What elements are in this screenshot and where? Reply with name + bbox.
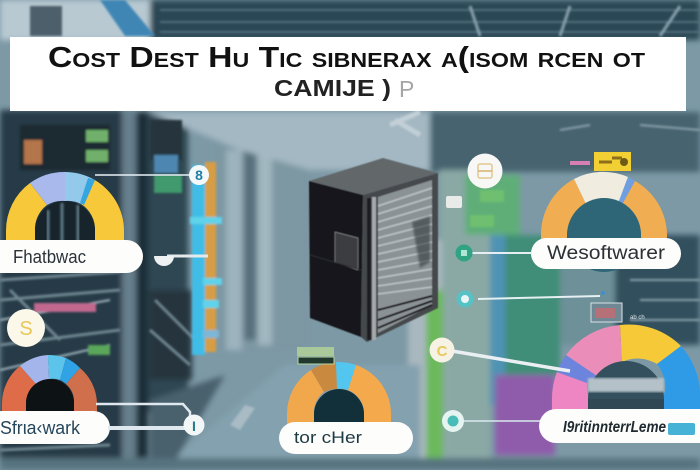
connector and badge: C badge to donut 5 xyxy=(430,338,570,371)
connector and badge: top left number: 8 xyxy=(195,167,203,183)
donut 5 label pill xyxy=(539,409,700,443)
donut 5: lower right xyxy=(552,324,700,437)
icon: small screen above donut 5 xyxy=(591,303,645,322)
teal tag in pill xyxy=(668,423,695,435)
connector and badge: lower teal xyxy=(442,410,540,432)
donut 2 centre xyxy=(567,198,641,272)
server label plate xyxy=(335,232,358,270)
donut 4 centre xyxy=(314,389,364,439)
icon: A badge xyxy=(468,154,502,188)
icon: small tag xyxy=(446,196,462,208)
connector and badge: green top xyxy=(456,244,532,262)
icon: small screen above donut 5: ab ch xyxy=(630,315,645,321)
icon: S badge xyxy=(7,309,45,347)
icon: green chip above donut 4 xyxy=(297,347,334,364)
icon: S badge: S xyxy=(19,318,33,340)
server cabinet xyxy=(309,158,438,342)
connector and badge: C badge to donut 5: C xyxy=(437,343,448,360)
donut 2 label pill xyxy=(531,238,681,269)
donut 2: top right xyxy=(541,172,667,272)
donut 3 label pill xyxy=(0,411,110,444)
connector and badge: teal middle xyxy=(456,290,605,308)
donut 5 label pill: I9ritinnterrLeme xyxy=(563,419,666,436)
donut 3 label pill: Sfrιa‹wark xyxy=(0,418,81,438)
donut 4 label pill: tor cHer xyxy=(294,428,362,447)
donut 1 label pill xyxy=(0,240,143,273)
donut 2 label pill: Wesoftwarer xyxy=(547,243,666,264)
title faded letter: P xyxy=(399,76,414,102)
donut 5 centre xyxy=(588,361,664,437)
connector and badge: top left number xyxy=(95,165,209,185)
icon: yellow tag xyxy=(570,152,631,171)
connector and badge: lower left: I xyxy=(192,418,196,434)
donut 3 centre xyxy=(26,379,74,427)
title line 2: CAMIJE ) xyxy=(274,75,391,101)
connector: left pill to bar xyxy=(154,256,208,266)
connector and badge: lower left xyxy=(96,404,204,436)
title banner xyxy=(10,37,686,111)
title line 1: Cost Dest Hu Tic sibnerax a(isom rcen ot xyxy=(48,42,645,74)
donut 1 centre xyxy=(35,201,95,261)
donut 3: lower left xyxy=(2,355,97,427)
donut 1: top left xyxy=(6,172,124,261)
donut 4 label pill xyxy=(279,422,413,454)
donut 1 label pill: Fhatbwac xyxy=(13,247,86,267)
donut 4: bottom centre xyxy=(287,362,391,439)
